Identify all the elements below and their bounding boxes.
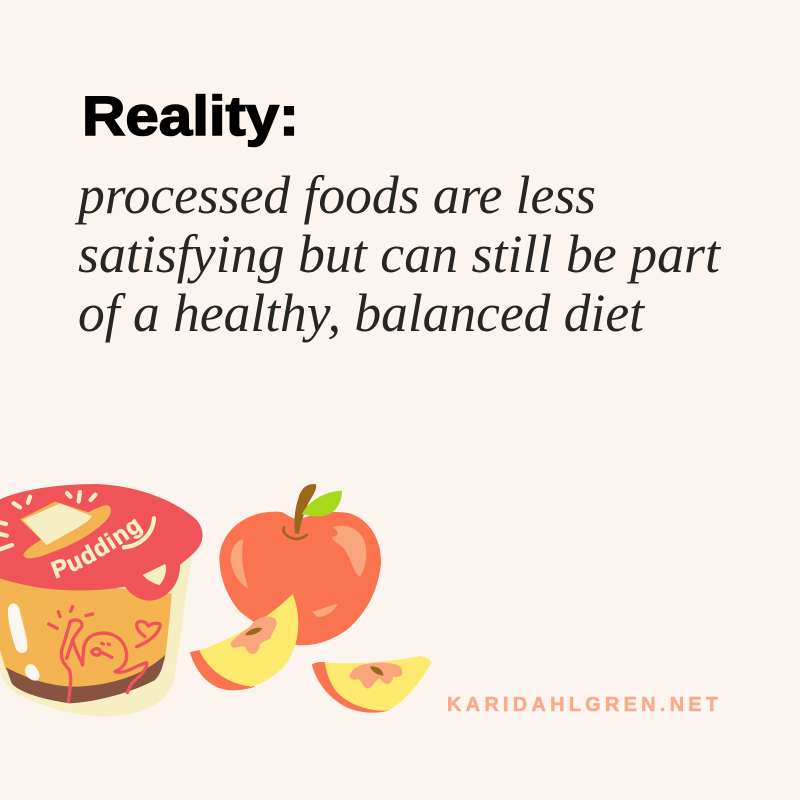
apple highlights [231,526,366,617]
apple leaf [302,491,342,516]
body statement: processed foods are less [74,165,596,225]
left slice core [231,616,277,654]
red lid [0,484,203,601]
left apple slice [190,594,298,690]
title: Reality: [82,84,299,147]
right slice flesh [325,656,432,711]
cup orange body [0,577,172,690]
right slice skin [312,662,388,713]
word: Pudding: Pudding [50,518,144,578]
body statement [74,165,722,343]
pudding caramel layer [6,655,165,703]
apple stem dimple [284,527,307,539]
butter and syrup on lid [23,505,111,558]
right slice seed [370,666,383,676]
left slice flesh [199,594,298,687]
cup outer cream shell [0,557,192,717]
right slice core [349,662,402,689]
body statement: of a healthy, balanced diet [78,283,646,343]
icon: pudding cup [0,484,203,717]
icon: apple with slices [190,484,432,713]
cup highlights [8,603,40,681]
lid sparkle marks [0,492,95,549]
apple stem [294,484,316,534]
website credit: KARIDAHLGREN.NET [447,694,718,716]
lid triangle fold [143,564,166,585]
right apple slice [312,656,432,713]
left slice skin [190,650,255,690]
left slice seed [245,628,262,635]
apple body [219,512,381,645]
body statement: satisfying but can still be part [78,224,722,284]
drawn figure on cup [49,607,160,702]
